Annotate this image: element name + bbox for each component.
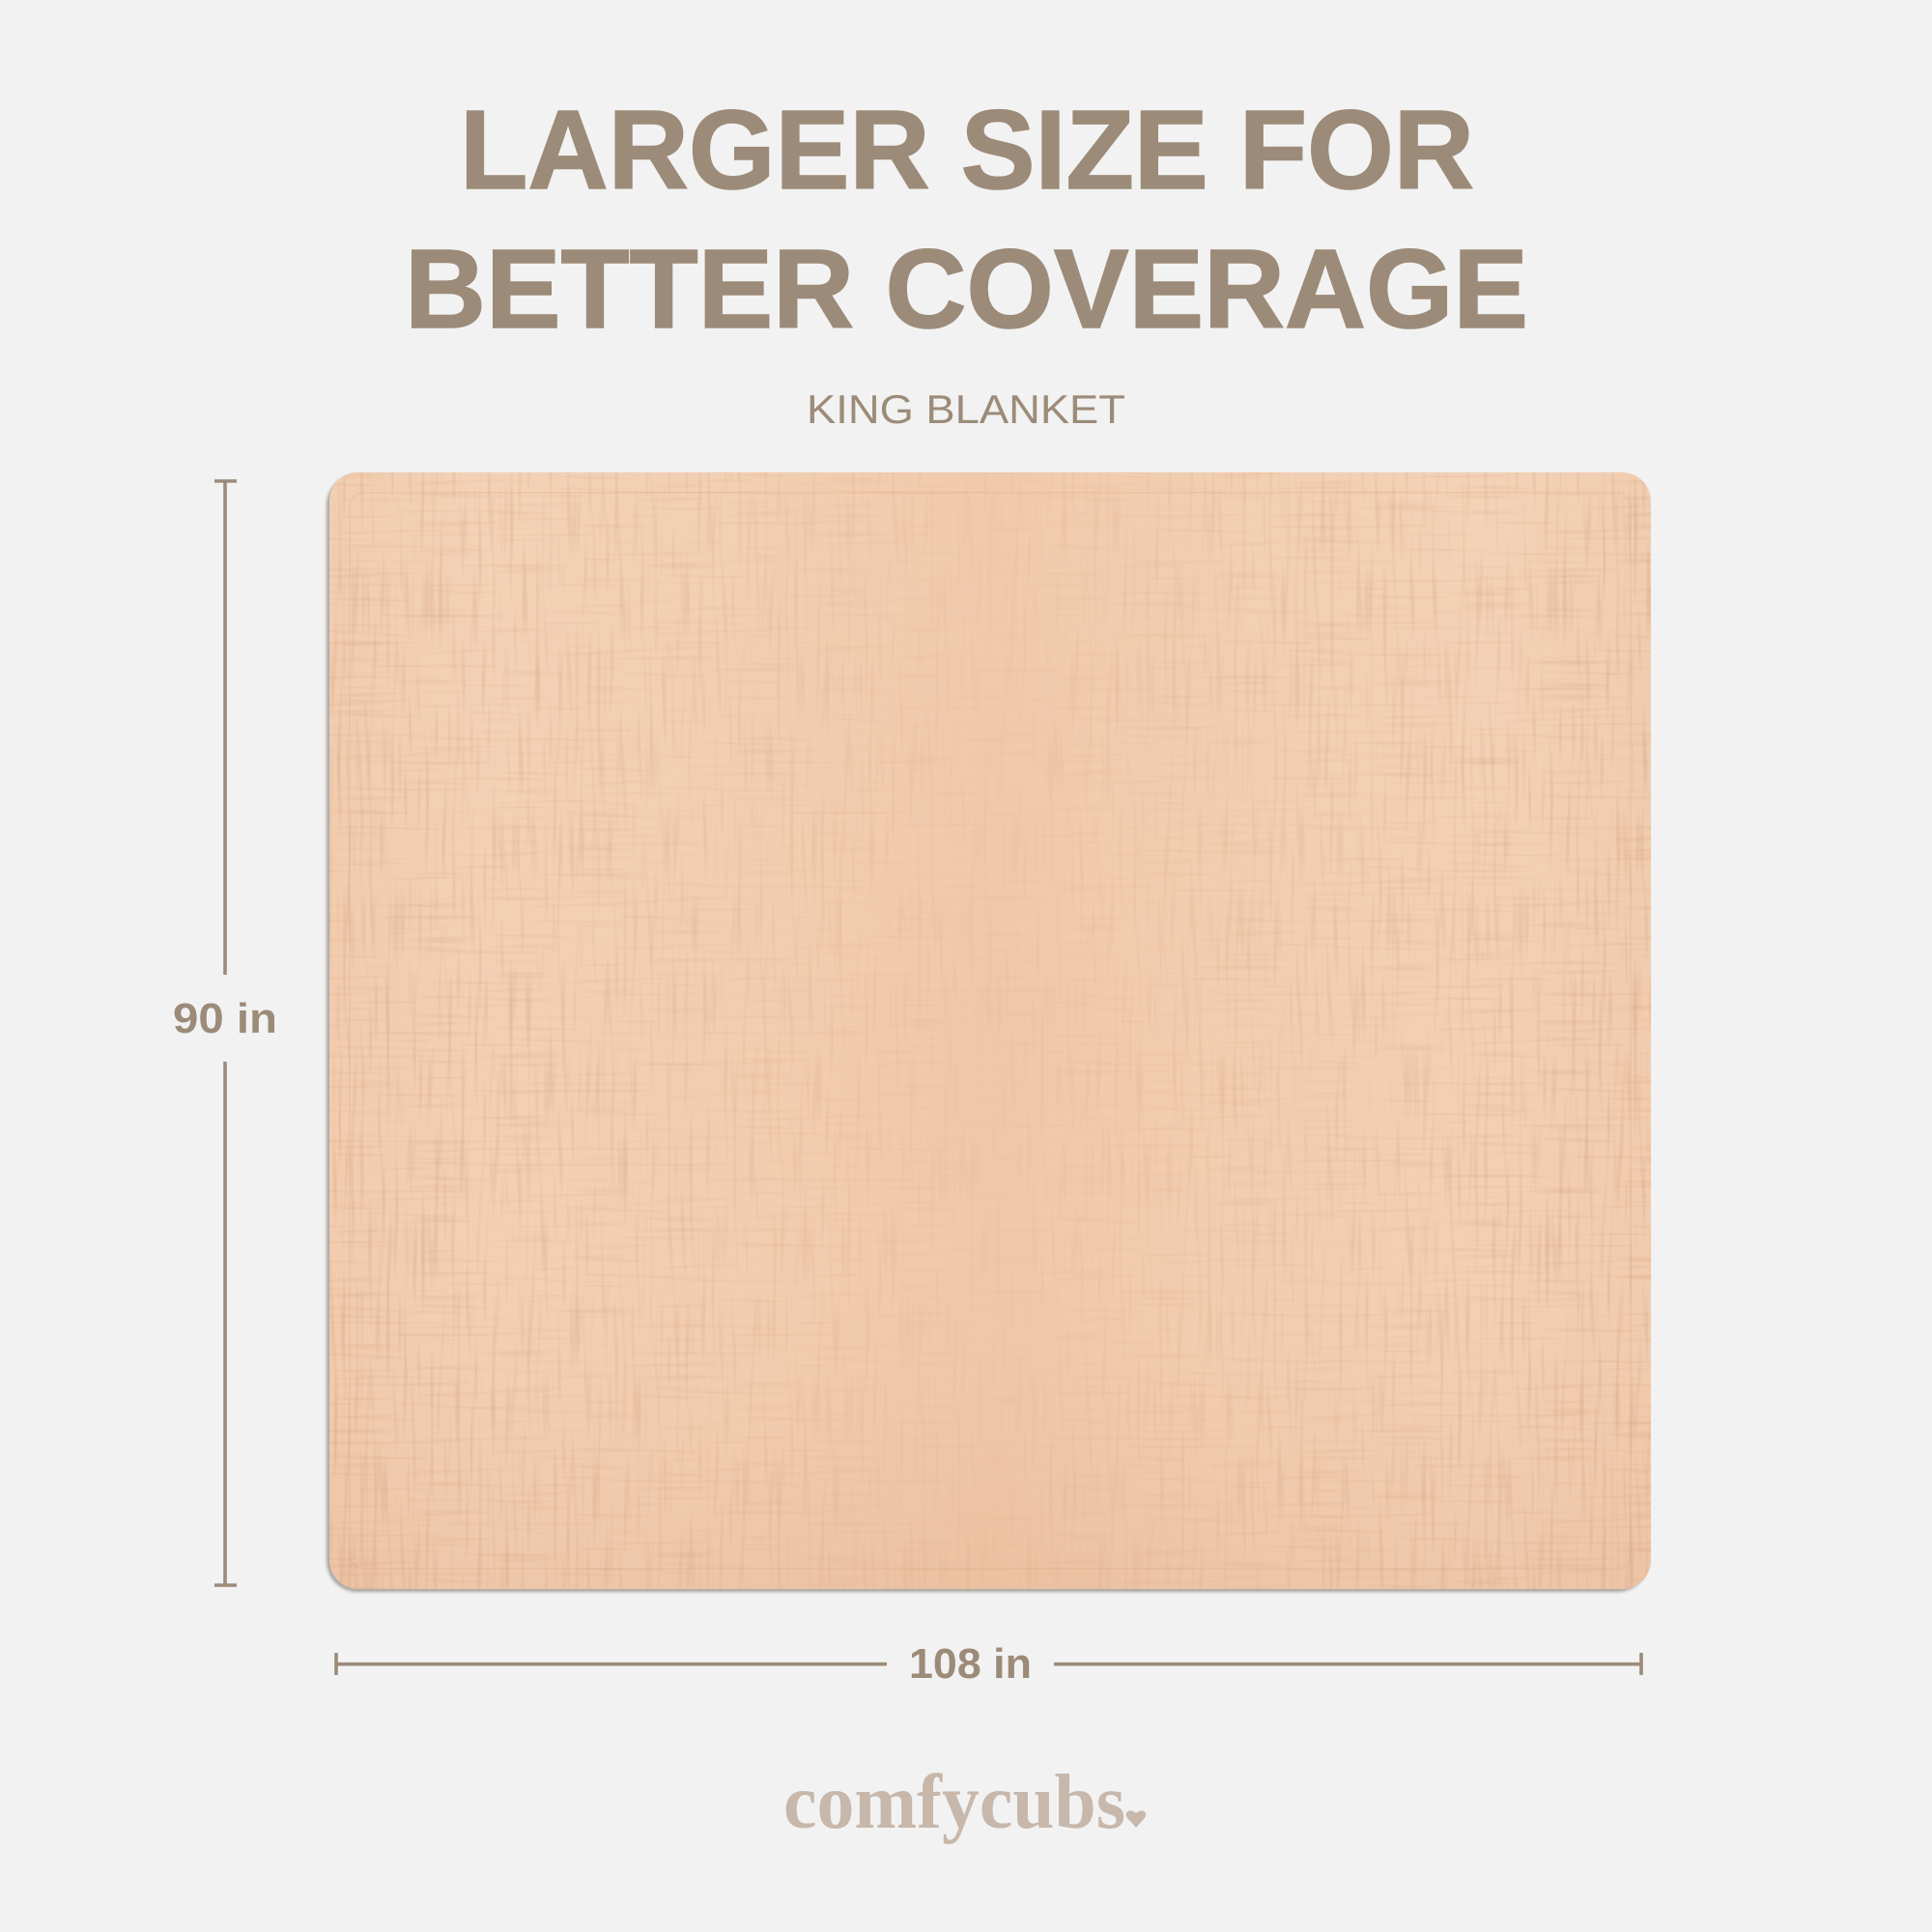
height label: 90 in [173, 995, 277, 1042]
title line 2: BETTER COVERAGE [405, 226, 1528, 352]
blanket [327, 472, 1651, 1592]
icon: heart [1126, 1810, 1146, 1828]
subtitle: KING BLANKET [807, 386, 1125, 432]
width line [336, 1653, 1641, 1675]
title [405, 87, 1528, 352]
logo [783, 1760, 1146, 1845]
title line 1: LARGER SIZE FOR [460, 87, 1474, 213]
width label: 108 in [909, 1640, 1032, 1688]
blanket fabric [329, 472, 1651, 1589]
height dimension: 90 in [173, 481, 277, 1585]
width dimension: 108 in [336, 1640, 1641, 1688]
logo wordmark: comfycubs [783, 1760, 1125, 1845]
blanket shadow [327, 474, 1648, 1592]
height line [214, 481, 237, 1585]
